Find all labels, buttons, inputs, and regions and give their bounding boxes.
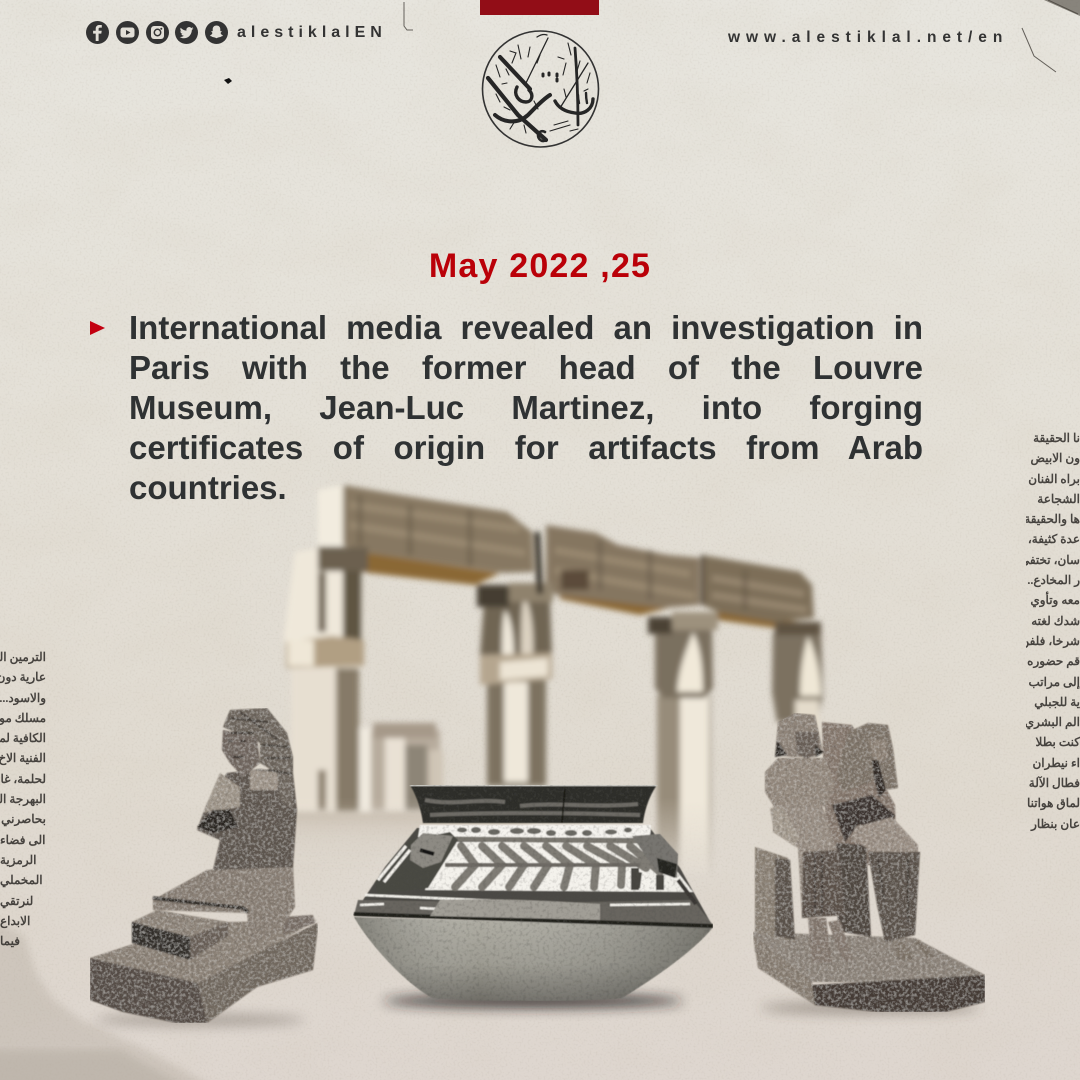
hand	[197, 810, 238, 833]
rim	[410, 785, 657, 823]
icon: twitter	[175, 21, 198, 44]
newspaper clipping: right edge: شدك لغته	[1031, 614, 1080, 628]
newspaper clipping: right edge: نا الحقيقة	[1033, 431, 1080, 445]
social handle: alestiklalEN	[237, 24, 387, 41]
architrave: blocks	[318, 485, 343, 545]
icon: instagram	[146, 21, 169, 44]
newspaper clipping: left edge	[0, 650, 46, 948]
abaci	[318, 547, 368, 571]
main illustration: temple and artifacts	[90, 482, 985, 1032]
back slab	[822, 722, 897, 865]
lap and legs	[153, 863, 295, 945]
artifact: painted pot (centre)	[353, 785, 713, 1008]
top red tab	[480, 0, 599, 15]
newspaper clipping: right edge: الم البشري	[1026, 715, 1080, 729]
newspaper clipping: left edge: المخملي	[0, 873, 43, 887]
right figure: body	[832, 795, 895, 842]
newspaper clipping: right edge: إلى مراتب	[1028, 675, 1080, 689]
newspaper clipping: right edge: ر المخادع..	[1027, 573, 1080, 587]
newspaper clipping: left edge: الابداع	[0, 914, 30, 928]
newspaper clipping: right edge: ية للجبلي	[1034, 695, 1080, 709]
newspaper clipping: right edge: اء نيطران	[1032, 756, 1080, 770]
body text: Museum, Jean-Luc Martinez, into forging	[129, 389, 923, 426]
newspaper clipping: left edge: الرمزية	[0, 853, 36, 867]
body text: Paris with the former head of the Louvre	[129, 349, 923, 386]
pedestal top	[90, 920, 317, 983]
newspaper clipping: right edge: قم حضوره	[1027, 654, 1080, 668]
temple ruins (blurred)	[284, 485, 823, 875]
newspaper clipping: right edge: الشجاعة	[1037, 492, 1080, 506]
seat block	[755, 847, 795, 942]
white panel	[425, 842, 693, 892]
column 1	[284, 548, 364, 811]
back step	[283, 915, 315, 935]
newspaper clipping: left edge: لنرتقي	[0, 894, 33, 908]
icon: snapchat	[205, 21, 228, 44]
torso	[197, 769, 297, 870]
newspaper clipping: right edge: كنت بطلا	[1036, 735, 1080, 749]
newspaper clipping: right edge: معه وتأوي	[1030, 593, 1080, 607]
newspaper clipping: right edge: لماق هواتنا	[1027, 796, 1080, 810]
body text: certificates of origin for artifacts from Arab	[129, 429, 923, 466]
lower band	[354, 900, 713, 925]
newspaper clipping: right edge: براه الفنان	[1028, 472, 1080, 486]
newspaper clipping: right edge	[1026, 431, 1080, 832]
newspaper clipping: left edge: والاسود...	[0, 691, 46, 705]
shoulder drape	[203, 773, 240, 813]
right lug	[632, 834, 678, 878]
bowl	[354, 917, 713, 1001]
body text: International media revealed an investigation in	[129, 309, 923, 346]
newspaper clipping: right edge: عدة كثيفة،	[1028, 532, 1080, 546]
newspaper clipping: right edge: ون الابيض	[1031, 451, 1080, 465]
icon: youtube	[116, 21, 139, 44]
column 4	[772, 632, 823, 730]
column 2	[480, 596, 552, 786]
left figure: body	[765, 758, 835, 807]
panel between figures	[836, 843, 871, 937]
bullet arrow	[90, 321, 105, 335]
column 3	[655, 630, 713, 875]
logo: calligraphic roundel	[482, 30, 600, 148]
rubble bottom-left corner	[0, 915, 219, 1080]
newspaper clipping: left edge: فيما	[0, 934, 20, 948]
footrest	[132, 910, 228, 960]
distant small temple	[355, 723, 443, 812]
pedestal side	[198, 923, 318, 1023]
plinth	[753, 932, 985, 982]
right figure: wig	[837, 723, 898, 792]
date heading: May 2022 ,25	[429, 247, 651, 285]
lap slit	[153, 898, 248, 912]
artifact: seated couple statue (right)	[753, 713, 985, 1014]
website url: www.alestiklal.net/en	[728, 29, 1008, 46]
social icons and handle	[86, 21, 387, 44]
chevrons	[455, 846, 660, 887]
pedestal front	[90, 958, 207, 1023]
icon: facebook	[86, 21, 109, 44]
newspaper clipping: right edge: فطال الآلة	[1029, 776, 1080, 790]
body text	[129, 309, 923, 506]
architrave: lintel undersides	[361, 553, 500, 585]
artifact: seated statue (left)	[90, 708, 318, 1026]
body text: countries.	[129, 469, 287, 506]
left lug	[375, 832, 458, 894]
wig	[223, 708, 293, 810]
face	[222, 730, 260, 777]
newspaper clipping: left edge: الى فضاء	[0, 833, 45, 847]
left figure: head	[775, 713, 823, 757]
neck band	[418, 825, 651, 838]
pot shoulder	[353, 828, 712, 925]
newspaper clipping: right edge: عان بنظار	[1031, 817, 1080, 831]
